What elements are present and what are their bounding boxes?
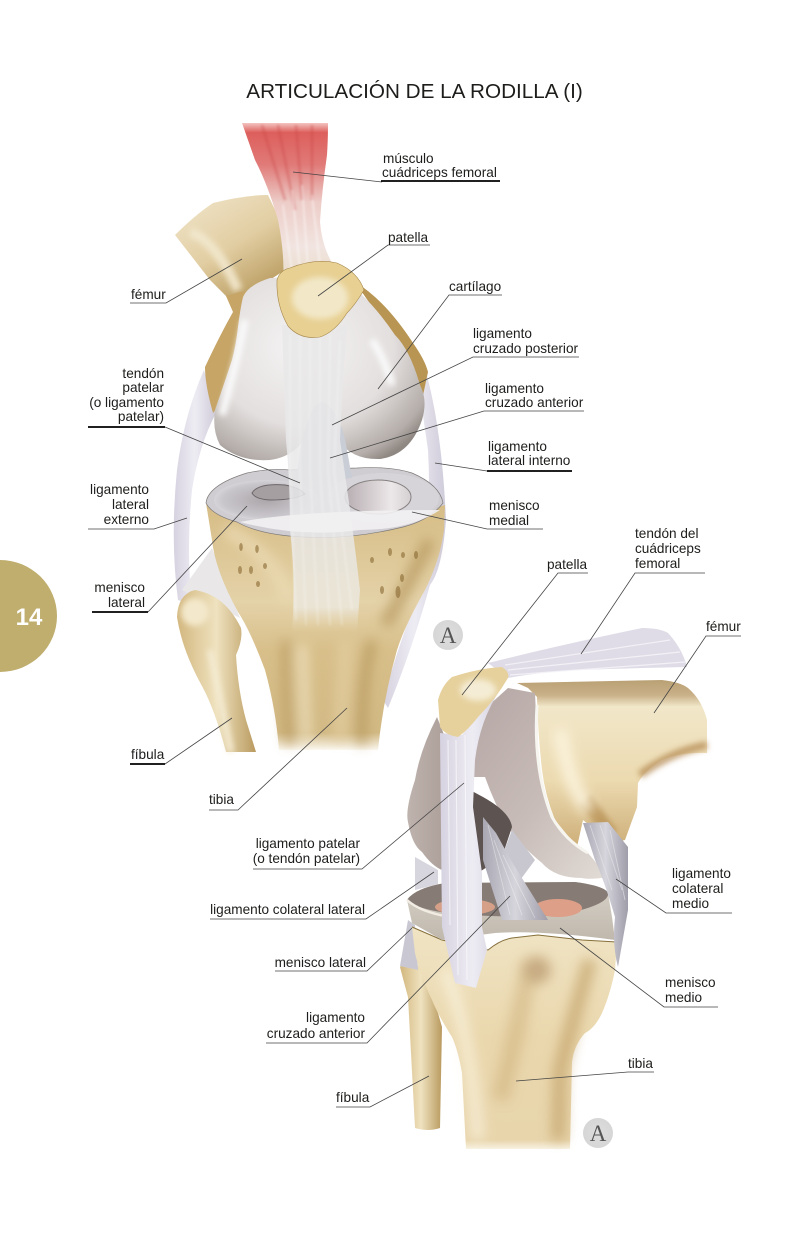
label: ligamento cruzado anterior, lateral view: ligamento: [306, 1010, 365, 1025]
label: menisco medio: [560, 928, 718, 1007]
lateral collateral ligament upper: [415, 857, 438, 890]
label: cartílago: cartílago: [449, 279, 501, 294]
label: menisco medial: menisco: [489, 498, 540, 513]
lateral collateral lower strip: [400, 920, 418, 970]
label: menisco lateral: menisco: [94, 580, 145, 595]
patellar ligament: [440, 680, 505, 988]
fibula: [400, 955, 442, 1130]
tibia pits: [238, 543, 418, 598]
label: ligamento cruzado posterior: ligamento: [473, 326, 532, 341]
patellar tendon: [282, 325, 360, 632]
transverse ligament: [240, 510, 440, 533]
label: músculo cuádriceps femoral: [293, 151, 500, 182]
label: tendón del cuádriceps femoral: femoral: [635, 556, 680, 571]
label: menisco medio: menisco: [665, 975, 716, 990]
femoral cartilage: [468, 688, 608, 879]
label: menisco lateral: [92, 506, 247, 612]
label: tendón patelar: (o ligamento: [89, 395, 164, 410]
medial collateral ligament: [583, 822, 628, 967]
label: fíbula lateral: fíbula: [336, 1090, 370, 1105]
label: fémur: [130, 259, 242, 303]
label: tibia front: tibia: [209, 792, 234, 807]
dark posterior recess: [407, 717, 470, 870]
illustration: lateral view of the knee: [400, 628, 707, 1149]
stamp A, lateral view: A: [590, 1121, 607, 1146]
lateral internal ligament: [383, 372, 446, 708]
cartilage: femoral condyles: [214, 278, 425, 460]
label: ligamento cruzado anterior: [330, 381, 584, 458]
label: tendón patelar: [88, 366, 300, 483]
label: ligamento colateral lateral: [210, 872, 434, 919]
label: ligamento cruzado posterior: cruzado posterior: [473, 341, 578, 356]
tibial plateau with menisci: [206, 468, 443, 538]
title: ARTICULACIÓN DE LA RODILLA (I): [246, 80, 583, 103]
label: ligamento lateral interno: ligamento: [488, 439, 547, 454]
meniscus: [407, 882, 615, 940]
label: fémur: fémur: [131, 287, 166, 302]
illustration: front view of the knee: [174, 123, 446, 752]
label: ligamento lateral externo: externo: [104, 512, 149, 527]
label: ligamento colateral lateral: ligamento colateral lateral: [210, 902, 365, 917]
label: tendón del cuádriceps femoral: cuádriceps: [635, 541, 701, 556]
stamp A, lateral view: [583, 1118, 613, 1148]
femur shaft: [175, 195, 287, 308]
label: patella: patella: [388, 230, 428, 245]
label: ligamento lateral interno: [435, 439, 572, 471]
page number tab: [0, 560, 57, 672]
cruciate ligaments: [502, 830, 535, 887]
medial meniscus opening: [345, 480, 411, 514]
label: menisco lateral, lateral view: menisco lateral: [275, 955, 366, 970]
label: ligamento cruzado anterior, lateral view: cruzado anterior: [267, 1026, 365, 1041]
cruciate ligaments: [296, 402, 352, 482]
tibia: [412, 927, 617, 1149]
label: ligamento cruzado posterior: [332, 326, 579, 425]
label: fíbula lateral: [336, 1076, 429, 1107]
label: ligamento patelar: ligamento patelar: [256, 836, 360, 851]
label: ligamento patelar: (o tendón patelar): [253, 851, 360, 866]
label: menisco medio: medio: [665, 990, 702, 1005]
label: tendón del cuádriceps femoral: [581, 526, 705, 654]
label: patella: [318, 230, 430, 296]
label: tibia front: [209, 708, 347, 810]
label: ligamento colateral medio: medio: [672, 896, 709, 911]
label: tendón del cuádriceps femoral: tendón del: [635, 526, 698, 541]
label: músculo cuádriceps femoral: músculo: [383, 151, 434, 166]
lateral meniscus opening: [252, 485, 305, 500]
label: ligamento lateral externo: ligamento: [90, 482, 149, 497]
label: menisco lateral: lateral: [108, 595, 145, 610]
lateral external ligament: [174, 370, 216, 605]
patella: [277, 261, 364, 338]
label: ligamento lateral externo: lateral: [112, 497, 149, 512]
label: patella lateral: patella: [547, 557, 587, 572]
label: fíbula front: [130, 718, 232, 764]
label: fíbula front: fíbula: [131, 747, 165, 762]
label: cartílago: [378, 279, 502, 389]
femoral bone backing: [205, 290, 270, 413]
label: patella lateral: [462, 557, 588, 695]
quadriceps muscle and tendon: [242, 123, 335, 282]
patella: [438, 667, 508, 737]
label: ligamento lateral externo: [88, 482, 187, 529]
label: fémur lateral: [654, 619, 741, 713]
label: tendón patelar: patelar: [122, 380, 164, 395]
tibia: [206, 503, 445, 750]
label: ligamento colateral medio: [616, 866, 732, 913]
label: ligamento patelar: [253, 783, 464, 869]
label: menisco medial: medial: [489, 513, 529, 528]
label: ligamento colateral medio: ligamento: [672, 866, 731, 881]
label: ligamento cruzado anterior: cruzado anterior: [485, 395, 584, 410]
label: fémur lateral: fémur: [706, 619, 741, 634]
femur: [517, 680, 707, 847]
label: menisco lateral, lateral view: [275, 928, 412, 971]
label: ligamento cruzado anterior: ligamento: [485, 381, 544, 396]
label: tibia lateral: tibia: [628, 1056, 653, 1071]
quadriceps tendon: [488, 628, 687, 678]
fibula: [177, 590, 256, 752]
label: tibia lateral: [516, 1056, 654, 1081]
label: menisco medial: [412, 498, 543, 529]
label: ligamento colateral medio: colateral: [672, 881, 723, 896]
label: músculo cuádriceps femoral: cuádriceps femoral: [382, 165, 497, 180]
page number tab: 14: [16, 604, 43, 631]
stamp A, front view: [433, 620, 463, 650]
label: ligamento lateral interno: lateral interno: [488, 453, 570, 468]
label: tendón patelar: tendón: [122, 366, 164, 381]
stamp A, front view: A: [440, 623, 457, 648]
label: tendón patelar: patelar): [118, 409, 164, 424]
meniscus upper lip: [407, 900, 450, 917]
label: ligamento cruzado anterior, lateral view: [266, 896, 510, 1043]
